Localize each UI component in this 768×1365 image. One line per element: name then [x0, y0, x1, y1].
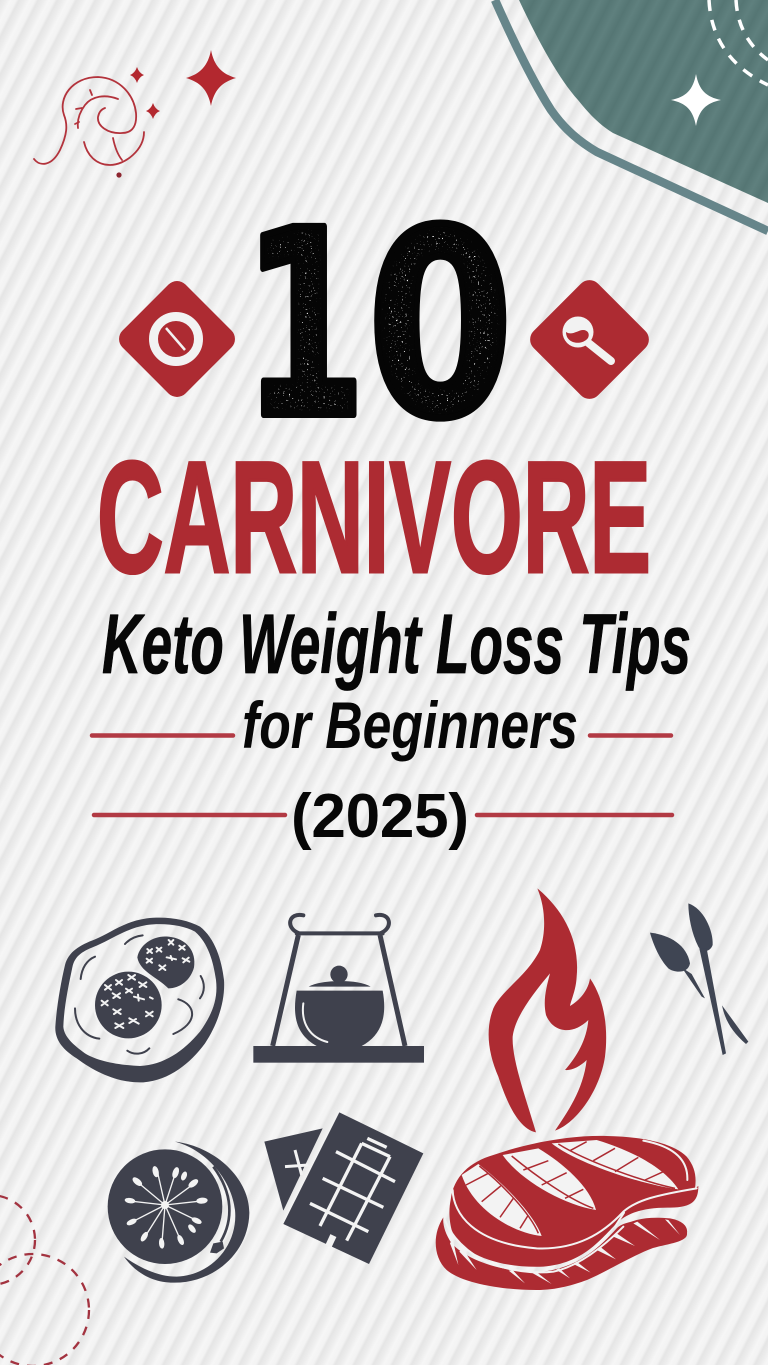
icon: pot on stand	[253, 915, 424, 1063]
icon: small sparkle lower	[146, 103, 160, 119]
icon: small sparkle	[130, 67, 144, 83]
number: 10 with speckled texture	[242, 175, 513, 476]
icon: dot	[116, 172, 122, 178]
icon: grilled steak	[436, 1136, 698, 1290]
subheading: for Beginners with rules: for Beginners	[242, 688, 578, 762]
steak grill panel middle	[503, 1148, 596, 1210]
plate specks	[102, 940, 189, 1028]
number: 10 with speckled texture: 0	[367, 175, 513, 476]
icon: crossed spoon and knife	[650, 903, 748, 1055]
disc rays	[125, 1166, 207, 1248]
icon: right red diamond with magnifier	[525, 275, 654, 404]
icon: large red sparkle	[186, 50, 236, 106]
steak grill lines	[466, 1142, 675, 1233]
steak lower ticks	[450, 1219, 680, 1284]
icon: red flame	[489, 888, 606, 1132]
icon: plate with two patties	[55, 918, 224, 1082]
corner panel: teal banner with dashed arcs and sparkle	[495, 0, 768, 231]
steak fat seam	[445, 1141, 697, 1272]
number: 10 with speckled texture: 1	[242, 176, 366, 476]
icon: round disc with radiating lines	[108, 1142, 249, 1283]
steak grill panel right	[552, 1140, 678, 1189]
decoration: bottom-left dashed circles	[0, 1195, 89, 1365]
icon: two cards with ladder and star	[264, 1112, 423, 1264]
subheading: year with rules: (2025)	[291, 782, 469, 851]
icon: white sparkle	[671, 74, 721, 126]
plate inner arcs	[75, 935, 204, 1054]
icon: red swirl line art with sparkles	[34, 50, 236, 178]
steak grill panel left	[462, 1164, 542, 1236]
icon: left red diamond with ring	[114, 276, 240, 402]
